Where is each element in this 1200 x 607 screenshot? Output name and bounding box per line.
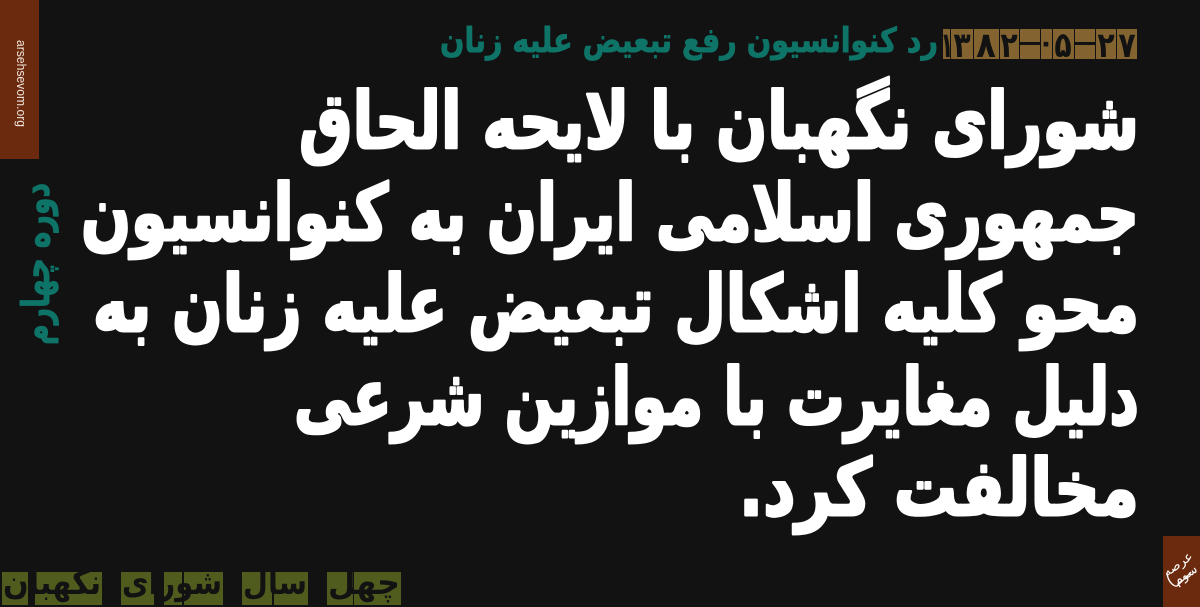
date stamp: ۲	[1097, 24, 1115, 66]
footer title stamp	[2, 563, 401, 605]
vertical label: period: دوره چهارم	[14, 183, 59, 345]
panel: side tab with site address	[0, 0, 39, 159]
icon: calligraphic logo: سوم	[1171, 562, 1200, 589]
site address: arsehsevom.org	[14, 40, 29, 127]
date stamp: ۱	[940, 24, 954, 65]
date stamp	[940, 24, 1137, 66]
subtitle: رد کنوانسیون رفع تبعیض علیه زنان	[440, 21, 938, 61]
date stamp: ۵	[1054, 24, 1072, 66]
date stamp: ۰	[1038, 28, 1054, 59]
footer title stamp: سال	[243, 563, 307, 603]
date stamp: ۲	[1000, 24, 1018, 66]
date stamp: ۳	[953, 24, 971, 66]
panel: corner logo	[1160, 536, 1200, 607]
icon: calligraphic logo: عرصه	[1160, 549, 1196, 580]
main statement	[81, 77, 1139, 534]
date stamp: ۷	[1118, 24, 1136, 66]
footer title stamp: شورای	[122, 563, 222, 603]
footer title stamp: نگهبان	[3, 563, 101, 603]
footer title stamp: چهل	[328, 563, 400, 603]
date stamp: ۸	[976, 25, 996, 65]
icon: calligraphic logo	[1160, 549, 1200, 591]
